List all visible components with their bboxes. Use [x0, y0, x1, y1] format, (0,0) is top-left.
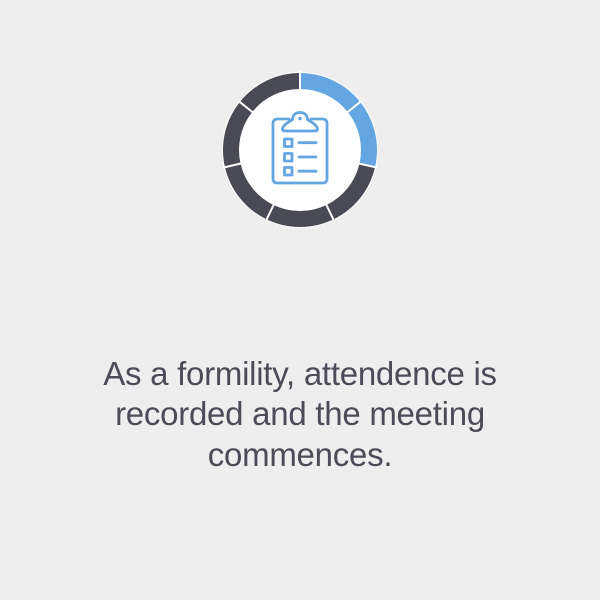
- caption text: recorded and the meeting: [115, 395, 485, 432]
- icon: clipboard checklist: [273, 112, 327, 183]
- ring segments: completed steps: [300, 81, 369, 165]
- caption text: [103, 355, 497, 473]
- ring segments: remaining steps: [231, 81, 367, 219]
- caption text: commences.: [208, 436, 392, 473]
- caption text: As a formility, attendence is: [103, 355, 497, 392]
